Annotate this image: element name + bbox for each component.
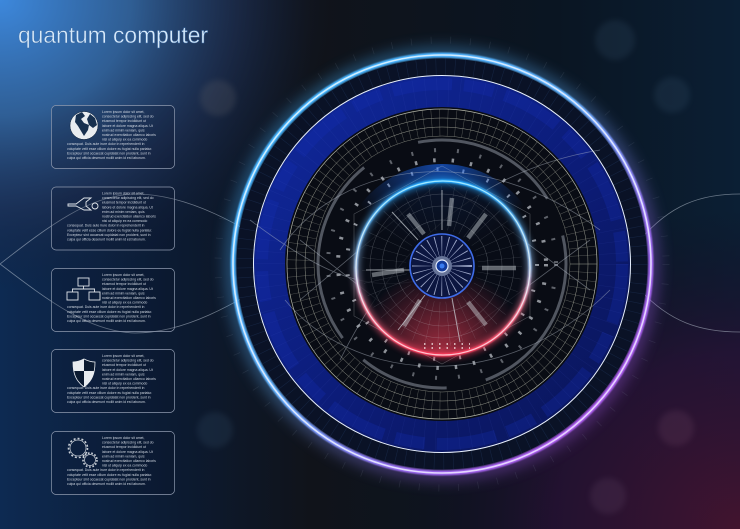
title: quantum computer bbox=[18, 22, 208, 48]
panel: gears: Excepteur sint occaecat cupidatat non proident, sunt in bbox=[67, 477, 151, 481]
outer glow ring bbox=[233, 55, 651, 473]
panel: gears: voluptate velit esse cillum dolore eu fugiat nulla pariatur. bbox=[67, 473, 152, 477]
panel: wrench bbox=[52, 187, 174, 250]
lower indicator dots bbox=[424, 344, 470, 348]
panel: network: nisi ut aliquip ex ea commodo bbox=[102, 301, 147, 305]
panel: shield: Excepteur sint occaecat cupidatat non proident, sunt in bbox=[67, 395, 151, 399]
inner disc bbox=[356, 182, 528, 354]
panel: wrench: nostrud exercitation ullamco laboris bbox=[102, 214, 156, 218]
panel: gears: nisi ut aliquip ex ea commodo bbox=[102, 464, 147, 468]
spokes bbox=[366, 190, 516, 342]
panel: gears: culpa qui officia deserunt mollit anim id est laborum. bbox=[67, 482, 146, 486]
panel: wrench: consectetur adipiscing elit, sed do bbox=[102, 196, 154, 200]
panel: gears: nostrud exercitation ullamco laboris bbox=[102, 459, 156, 463]
panel: network: Lorem ipsum dolor sit amet, bbox=[102, 273, 144, 277]
icon: gears bbox=[68, 438, 97, 467]
core bbox=[410, 234, 474, 298]
panel: globe: Excepteur sint occaecat cupidatat non proident, sunt in bbox=[67, 151, 151, 155]
panel: globe: culpa qui officia deserunt mollit anim id est laborum. bbox=[67, 156, 146, 160]
panel: wrench: consequat. Duis aute irure dolor in reprehenderit in bbox=[67, 224, 144, 228]
panel: globe: consectetur adipiscing elit, sed do bbox=[102, 115, 154, 119]
panel: wrench: voluptate velit esse cillum dolore eu fugiat nulla pariatur. bbox=[67, 228, 152, 232]
panel: network: labore et dolore magna aliqua. Ut bbox=[102, 287, 153, 291]
panel: globe: nisi ut aliquip ex ea commodo bbox=[102, 138, 147, 142]
panel: gears: labore et dolore magna aliqua. Ut bbox=[102, 450, 153, 454]
panel: shield: enim ad minim veniam, quis bbox=[102, 372, 145, 376]
panel: globe: consequat. Duis aute irure dolor in reprehenderit in bbox=[67, 142, 144, 146]
panel: network bbox=[52, 268, 174, 332]
icon: globe bbox=[70, 112, 98, 140]
panel: shield: nisi ut aliquip ex ea commodo bbox=[102, 382, 147, 386]
panel: shield: eiusmod tempor incididunt ut bbox=[102, 363, 146, 367]
faint outer ticks bbox=[218, 40, 666, 488]
central device bbox=[218, 40, 666, 488]
panel: globe: enim ad minim veniam, quis bbox=[102, 128, 145, 132]
panel: gears: eiusmod tempor incididunt ut bbox=[102, 445, 146, 449]
blue glow behind inner ring bbox=[340, 164, 544, 368]
panel: network: enim ad minim veniam, quis bbox=[102, 291, 145, 295]
panel: globe: eiusmod tempor incididunt ut bbox=[102, 119, 146, 123]
panel: wrench: Excepteur sint occaecat cupidatat non proident, sunt in bbox=[67, 233, 151, 237]
panel: shield: voluptate velit esse cillum dolore eu fugiat nulla pariatur. bbox=[67, 391, 152, 395]
panel: network: consectetur adipiscing elit, sed do bbox=[102, 278, 154, 282]
panel: globe bbox=[52, 106, 174, 168]
panel: network: eiusmod tempor incididunt ut bbox=[102, 282, 146, 286]
blue band bbox=[254, 76, 630, 452]
panel: network: culpa qui officia deserunt mollit anim id est laborum. bbox=[67, 319, 146, 323]
panel: shield: Lorem ipsum dolor sit amet, bbox=[102, 354, 144, 358]
icon: shield bbox=[73, 359, 95, 387]
panel: gears bbox=[52, 432, 174, 494]
panel: network: consequat. Duis aute irure dolor in reprehenderit in bbox=[67, 305, 144, 309]
panel: network: nostrud exercitation ullamco laboris bbox=[102, 296, 156, 300]
icon: network bbox=[67, 278, 100, 300]
panel: shield: culpa qui officia deserunt mollit anim id est laborum. bbox=[67, 400, 146, 404]
panel: globe: nostrud exercitation ullamco laboris bbox=[102, 133, 156, 137]
wave lines bbox=[0, 194, 740, 333]
panel: globe: Lorem ipsum dolor sit amet, bbox=[102, 110, 144, 114]
panel: network: Excepteur sint occaecat cupidatat non proident, sunt in bbox=[67, 314, 151, 318]
panel: shield bbox=[52, 350, 174, 412]
panel: wrench: culpa qui officia deserunt mollit anim id est laborum. bbox=[67, 238, 146, 242]
panel: globe: labore et dolore magna aliqua. Ut bbox=[102, 124, 153, 128]
panel: gears: enim ad minim veniam, quis bbox=[102, 454, 145, 458]
data dashes bbox=[328, 150, 556, 378]
panel: globe: voluptate velit esse cillum dolore eu fugiat nulla pariatur. bbox=[67, 147, 152, 151]
hexagon lines bbox=[354, 166, 530, 364]
dark disc bbox=[285, 107, 599, 421]
panel: shield: labore et dolore magna aliqua. Ut bbox=[102, 368, 153, 372]
panel: network: voluptate velit esse cillum dolore eu fugiat nulla pariatur. bbox=[67, 310, 152, 314]
panel: gears: Lorem ipsum dolor sit amet, bbox=[102, 436, 144, 440]
panel: gears: consequat. Duis aute irure dolor in reprehenderit in bbox=[67, 468, 144, 472]
panel: shield: consequat. Duis aute irure dolor in reprehenderit in bbox=[67, 386, 144, 390]
panel: wrench: enim ad minim veniam, quis bbox=[102, 210, 145, 214]
panel: wrench: nisi ut aliquip ex ea commodo bbox=[102, 219, 147, 223]
red glow bbox=[354, 180, 530, 356]
panel: gears: consectetur adipiscing elit, sed do bbox=[102, 441, 154, 445]
panel: shield: nostrud exercitation ullamco laboris bbox=[102, 377, 156, 381]
inner neon ring bbox=[356, 181, 530, 355]
icon: wrench bbox=[68, 198, 98, 210]
panel: wrench: Lorem ipsum dolor sit amet, bbox=[102, 192, 144, 196]
dark segmented band bbox=[245, 67, 639, 461]
panel: wrench: eiusmod tempor incididunt ut bbox=[102, 201, 146, 205]
panel: shield: consectetur adipiscing elit, sed do bbox=[102, 359, 154, 363]
panel: wrench: labore et dolore magna aliqua. Ut bbox=[102, 205, 153, 209]
grid ring bbox=[287, 109, 597, 419]
crossing arcs bbox=[250, 150, 610, 366]
